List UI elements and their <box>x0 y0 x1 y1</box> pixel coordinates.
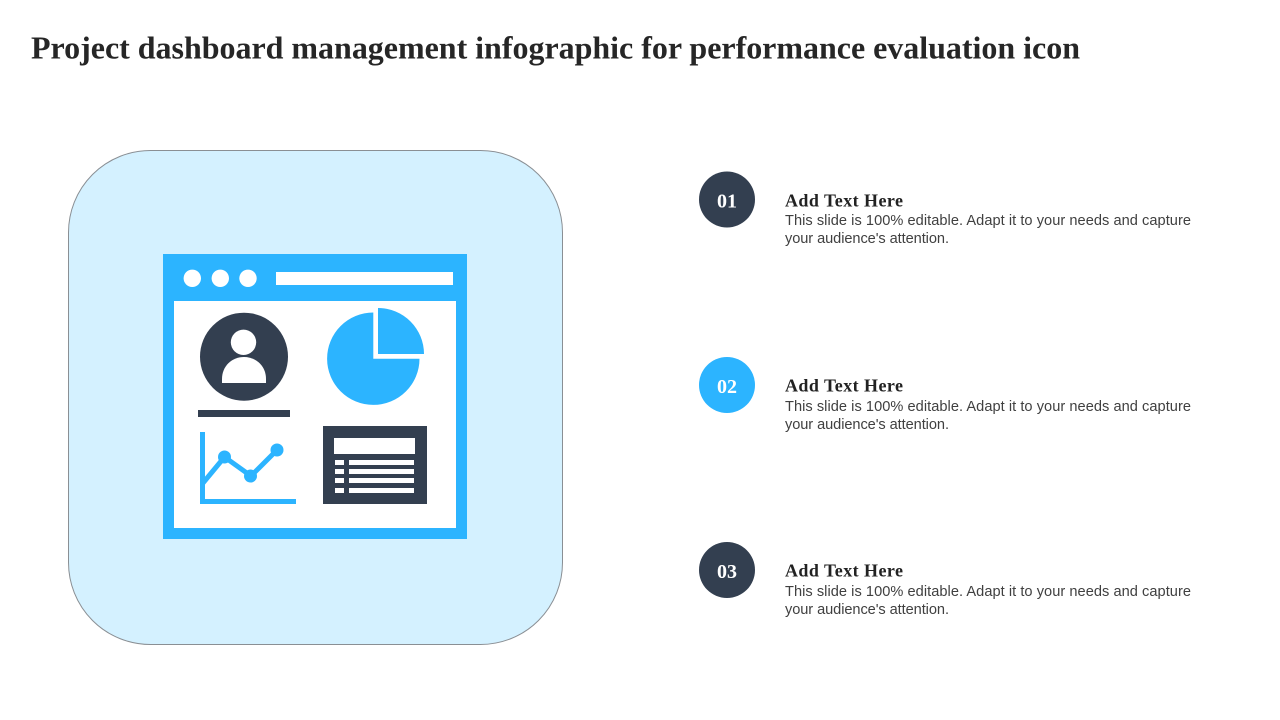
badge 01: 01 <box>717 190 737 212</box>
item 03 <box>699 542 1191 618</box>
badge 02 <box>699 357 755 413</box>
title: Project dashboard management infographic for performance evaluation icon <box>31 30 1080 66</box>
address bar <box>276 272 453 285</box>
body text 02: your audience's attention. <box>785 417 949 433</box>
body text 02 <box>785 399 1191 433</box>
table panel <box>323 426 427 504</box>
body text 01: your audience's attention. <box>785 231 949 247</box>
icon: user avatar <box>200 313 288 401</box>
body text 03: your audience's attention. <box>785 602 949 618</box>
heading 02: Add Text Here <box>785 376 903 396</box>
body text 03 <box>785 584 1191 618</box>
body text 01: This slide is 100% editable. Adapt it to your needs and capture <box>785 213 1191 229</box>
body text 03: This slide is 100% editable. Adapt it to your needs and capture <box>785 584 1191 600</box>
body text 02: This slide is 100% editable. Adapt it to your needs and capture <box>785 399 1191 415</box>
heading 01: Add Text Here <box>785 190 903 210</box>
item 01 <box>699 172 1191 247</box>
badge 01 <box>699 172 755 228</box>
badge 03: 03 <box>717 561 737 583</box>
item 02 <box>699 357 1191 433</box>
badge 02: 02 <box>717 376 737 398</box>
line chart <box>202 432 296 502</box>
icon: dashboard window <box>163 254 467 539</box>
icon: pie chart <box>327 308 424 405</box>
panel: light blue rounded square <box>68 150 562 644</box>
window control dots <box>184 270 257 287</box>
window content area <box>174 301 456 528</box>
badge 03 <box>699 542 755 598</box>
window frame <box>163 254 467 539</box>
heading 03: Add Text Here <box>785 560 903 580</box>
body text 01 <box>785 213 1191 247</box>
user name bar <box>198 410 290 417</box>
